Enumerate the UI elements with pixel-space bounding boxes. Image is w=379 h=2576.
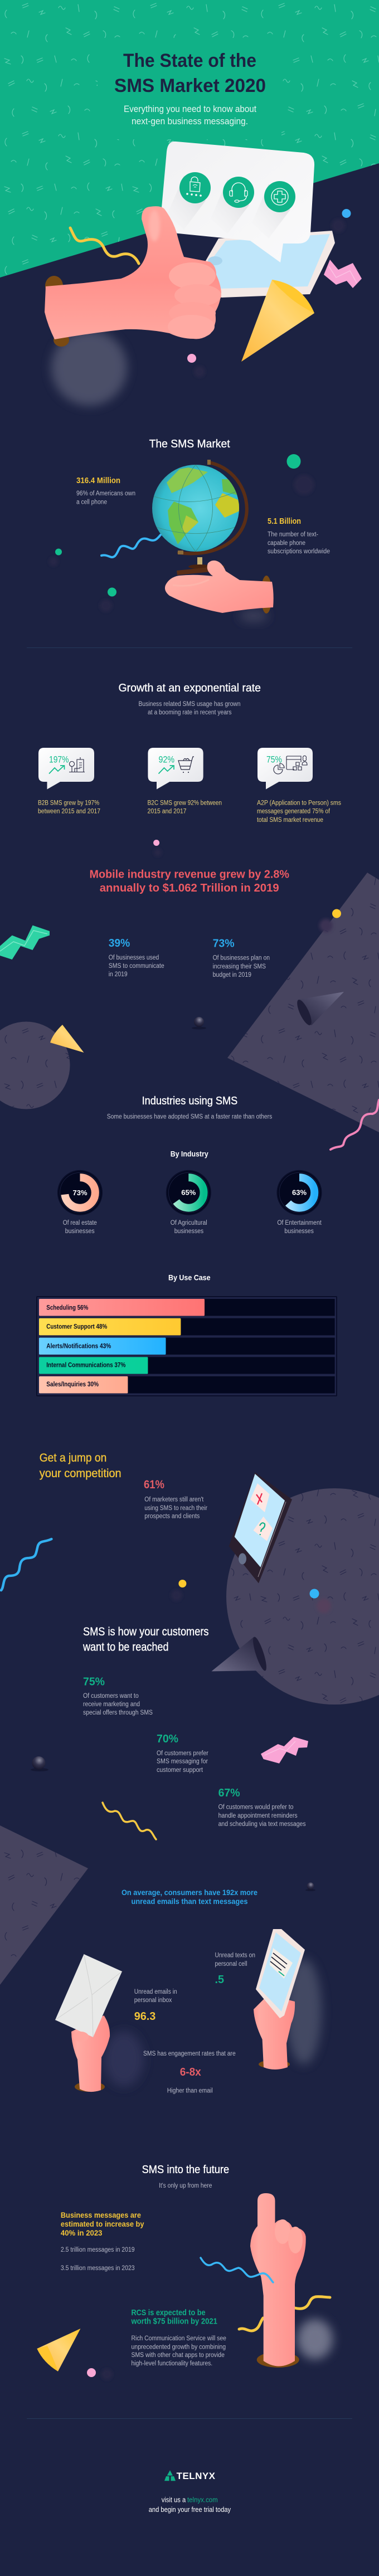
stat: 316.4 Million: [76, 476, 135, 506]
stat: unread emails: 96.3: [134, 2010, 156, 2023]
heading: SMS is how your customers want to be reached: SMS is how your customers: [83, 1625, 208, 1638]
illustration: hand holding envelope: [55, 1954, 122, 2092]
call to action: and begin your free trial today: [149, 2505, 231, 2514]
icon: green zigzag: [0, 926, 50, 960]
patterned circle left: [0, 1022, 70, 1109]
heading: SMS into the future: SMS into the future: [142, 2164, 229, 2176]
illustration: hand holding phone: [254, 1929, 305, 2069]
stat: 39%: in 2019: [109, 971, 128, 978]
card: B2B 197%: 197%: [49, 754, 69, 764]
call to action: telnyx.com: [187, 2496, 218, 2504]
icon: yellow cone: [241, 280, 314, 362]
bar: Scheduling: [39, 1299, 205, 1316]
heading: SMS into the future: [142, 2164, 229, 2189]
heading: Growth at an exponential rate: at a booming rate in recent years: [148, 709, 232, 716]
icon: medical cross: [264, 181, 295, 212]
heading: The SMS Market: The SMS Market: [149, 438, 230, 450]
heading: Get a jump on your competition: Get a jump on: [40, 1452, 106, 1464]
logo: Telnyx: TELNYX: [177, 2471, 216, 2481]
icon: yellow cone small: [50, 1025, 84, 1053]
stat: RCS: SMS with other chat apps to provide: [132, 2352, 225, 2359]
title: [114, 50, 266, 96]
bar: Sales/Inquiries: Sales/Inquiries 30%: [46, 1381, 99, 1388]
stat: RCS: RCS is expected to be: [132, 2308, 205, 2317]
blue squiggle: [201, 2258, 273, 2282]
icon: blue phone behind bubble: [206, 231, 335, 298]
icon: question bubble: [253, 1517, 273, 1541]
stat: 5.1 Billion: The number of text-: [268, 532, 318, 538]
stat: 5.1 Billion: 5.1 Billion: [268, 517, 301, 526]
stat: business messages: 2.5 trillion messages in 2019: [61, 2247, 135, 2253]
caption: A2P: total SMS market revenue: [257, 817, 323, 824]
donut captions: [63, 1220, 322, 1235]
stat: 61%: Of marketers still aren't: [144, 1497, 204, 1503]
subtitle: [124, 104, 256, 126]
heading: SMS is how your customers want to be reached: want to be reached: [82, 1640, 168, 1654]
stat: 67%: [218, 1787, 306, 1828]
bar: Scheduling: Scheduling 56%: [46, 1305, 88, 1312]
subtitle: Everything you need to know about: [124, 104, 256, 114]
headline: mobile revenue: [89, 868, 289, 894]
speech bubble with three icons: [161, 142, 314, 262]
donut chart: 63% entertainment: 63%: [292, 1188, 307, 1197]
icon: building and tree: [69, 757, 85, 772]
stat: 5.1 Billion: capable phone: [268, 540, 305, 547]
blue squiggle: [101, 535, 161, 557]
subheading: By Industry: By Industry: [171, 1150, 208, 1158]
bar: Sales/Inquiries: [39, 1376, 128, 1393]
stat: business messages: [61, 2210, 144, 2272]
stat: 73%: increasing their SMS: [213, 963, 266, 970]
heading: Industries using SMS: Industries using SMS: [142, 1095, 237, 1107]
donut chart: 65% agricultural: [167, 1171, 211, 1215]
stat: 39%: Of businesses used: [109, 955, 159, 961]
donut chart: 73% real estate: 73%: [72, 1189, 88, 1197]
stat: business messages: 3.5 trillion messages in 2023: [61, 2265, 135, 2272]
stat: 70%: 70%: [157, 1733, 178, 1745]
blue squiggle: [1, 1539, 51, 1590]
icon: small dark sphere: [305, 1882, 315, 1891]
heading: Get a jump on your competition: your competition: [40, 1467, 122, 1480]
stat: 67%: Of customers would prefer to: [218, 1804, 293, 1811]
donut captions: businesses: [65, 1228, 95, 1235]
green dots: [49, 454, 314, 612]
call to action: visit us a: [162, 2496, 186, 2504]
heading: Industries using SMS: [107, 1095, 273, 1121]
caption: B2B: between 2015 and 2017: [38, 809, 100, 815]
title: SMS Market 2020: [114, 75, 266, 96]
donut chart: 63% entertainment: [278, 1171, 321, 1215]
caption: A2P: messages generated 75% of: [257, 809, 331, 815]
stat: 5.1 Billion: subscriptions worldwide: [268, 548, 330, 555]
headline: unread emails: unread emails than text messages: [132, 1897, 248, 1906]
icon: shopping cart: [178, 757, 194, 770]
icon: dark cone 2: [212, 1635, 269, 1672]
stat: 61%: using SMS to reach their: [144, 1505, 207, 1512]
stat: 67%: and scheduling via text messages: [218, 1821, 306, 1828]
yellow squiggle: [103, 1803, 156, 1839]
caption: B2B: [38, 800, 100, 815]
stat: engagement 6-8x: 6-8x: [180, 2066, 201, 2078]
stat: 73%: 73%: [213, 938, 235, 950]
stat: 61%: prospects and clients: [144, 1513, 200, 1520]
glow behind hands: [104, 1959, 322, 2087]
card: B2C 92%: [148, 748, 203, 789]
icon: headset: [223, 177, 254, 208]
large patterned circle: [226, 1488, 379, 1705]
headline: mobile revenue: Mobile industry revenue grew by 2.8%: [89, 868, 289, 881]
stat: unread emails: [134, 1989, 177, 2023]
yellow dot: [319, 909, 341, 932]
stat: 70%: Of customers prefer: [157, 1750, 208, 1757]
stat: 70%: customer support: [157, 1767, 203, 1774]
illustration: tilted phone with bubbles: [229, 1472, 292, 1583]
stat: 316.4 Million: a cell phone: [76, 499, 107, 506]
stat: unread texts: .5: [215, 1974, 224, 1986]
stat: business messages: 40% in 2023: [61, 2228, 103, 2237]
icon: growth arrow: [49, 766, 65, 773]
caption: A2P: A2P (Application to Person) sms: [257, 800, 341, 807]
card: A2P 75%: [257, 748, 313, 789]
stat: 5.1 Billion: [268, 517, 330, 555]
illustration: thumbs up hand: [45, 206, 221, 347]
stat: 39%: [109, 937, 164, 978]
glow under thumb arm: [51, 330, 127, 406]
heading: Growth at an exponential rate: Business related SMS usage has grown: [138, 701, 241, 708]
stat: unread emails: personal inbox: [134, 1997, 172, 2004]
stat: unread texts: [215, 1952, 255, 1986]
stat: unread texts: personal cell: [215, 1961, 247, 1968]
stat: 75%: receive marketing and: [83, 1701, 140, 1708]
stat: RCS: worth $75 billion by 2021: [131, 2317, 217, 2326]
card: B2C 92%: 92%: [158, 754, 174, 764]
donut captions: Of Entertainment: [277, 1220, 322, 1226]
stat: 70%: [157, 1733, 208, 1774]
stat: business messages: Business messages are: [61, 2210, 141, 2219]
stat: 316.4 Million: 316.4 Million: [76, 476, 120, 485]
bar: Internal Communications: Internal Communications 37%: [46, 1362, 125, 1369]
icon: dark sphere: [192, 1017, 206, 1030]
headline: mobile revenue: annually to $1.062 Trillion in 2019: [100, 882, 279, 894]
stat: unread texts: Unread texts on: [215, 1952, 255, 1959]
caption: B2B: B2B SMS grew by 197%: [38, 800, 99, 807]
headline: unread emails: [122, 1888, 257, 1906]
donut captions: Of Agricultural: [171, 1220, 207, 1226]
stat: 75%: Of customers want to: [83, 1693, 139, 1700]
pink dot: [87, 2368, 113, 2380]
icon: phone: [256, 1929, 305, 2018]
stat: RCS: unprecedented growth by combining: [132, 2344, 226, 2350]
stat: 75%: special offers through SMS: [83, 1710, 153, 1716]
patterned quadrilateral left: [0, 1825, 88, 1985]
stat: RCS: Rich Communication Service will see: [132, 2335, 226, 2342]
heading: Get a jump on your competition: [40, 1452, 122, 1480]
subheading: By Use Case: By Use Case: [168, 1273, 211, 1282]
pink squiggle: [331, 1100, 379, 1150]
stat: engagement 6-8x: SMS has engagement rates that are: [143, 2051, 236, 2057]
pink dot: [153, 840, 162, 856]
heading: SMS into the future: It's only up from here: [159, 2183, 212, 2189]
decorative dots: [187, 209, 351, 377]
stat: 39%: SMS to communicate: [109, 963, 164, 970]
small dots: [171, 1580, 331, 1613]
stat: engagement 6-8x: [143, 2051, 236, 2095]
patterned quadrilateral right: [227, 873, 379, 1132]
stat: 61%: [144, 1478, 207, 1520]
icon: yellow cone bottom: [37, 2329, 80, 2372]
headline: unread emails: On average, consumers have 192x more: [122, 1888, 257, 1897]
caption: A2P: [257, 800, 341, 824]
icon: X bubble: [250, 1483, 270, 1512]
bar: Alerts/Notifications: [39, 1338, 166, 1355]
icon: growth arrow: [158, 766, 174, 773]
donut chart: 73% real estate: [58, 1171, 102, 1215]
bar: Customer Support: Customer Support 48%: [46, 1324, 107, 1331]
icon: pie chart: [274, 763, 284, 774]
illustration: globe on stand: [152, 460, 247, 575]
icon: dark sphere: [31, 1756, 48, 1771]
subtitle: next-gen business messaging.: [132, 116, 248, 126]
glow under globe hand: [239, 609, 268, 622]
caption: B2C: [147, 800, 222, 815]
icon: dashboard and user: [286, 756, 307, 770]
stat: 73%: [213, 938, 270, 978]
icon: pink zigzag: [261, 1737, 308, 1764]
call to action: [149, 2496, 231, 2514]
card: B2B 197%: [38, 748, 94, 789]
illustration: pointing finger hand: [250, 2193, 306, 2368]
stat: 70%: SMS messaging for: [157, 1759, 208, 1765]
stat: 39%: 39%: [109, 937, 130, 949]
stat: RCS: high-level functionality features.: [132, 2360, 212, 2367]
stat: business messages: estimated to increase by: [61, 2219, 144, 2228]
bar: Customer Support: [39, 1318, 181, 1335]
stat: 75%: [83, 1676, 153, 1716]
donut captions: businesses: [284, 1228, 314, 1235]
bar: Alerts/Notifications: Alerts/Notifications 43%: [46, 1343, 111, 1350]
illustration: hand holding globe: [165, 561, 274, 613]
title: The State of the: [123, 50, 256, 71]
donut captions: Of real estate: [63, 1220, 97, 1226]
caption: B2C: 2015 and 2017: [147, 809, 186, 815]
stat: engagement 6-8x: Higher than email: [167, 2088, 213, 2095]
icon: pink zigzag: [324, 260, 362, 288]
stat: 67%: 67%: [218, 1787, 240, 1799]
stat: 67%: handle appointment reminders: [218, 1813, 298, 1819]
stat: 61%: 61%: [144, 1478, 164, 1491]
icon: lock with password: [179, 172, 211, 203]
stat: 75%: 75%: [83, 1676, 105, 1688]
stat: 73%: budget in 2019: [213, 972, 251, 978]
card: A2P 75%: 75%: [266, 754, 282, 764]
icon: dark cone: [294, 992, 344, 1027]
stat: 73%: Of businesses plan on: [213, 955, 270, 962]
donut captions: businesses: [174, 1228, 203, 1235]
glow behind finger arm: [297, 2319, 333, 2359]
icon: envelope: [55, 1954, 122, 2037]
panel: green header background: [0, 0, 379, 277]
bar: Internal Communications: [39, 1357, 148, 1374]
stat: unread emails: Unread emails in: [134, 1989, 177, 1995]
heading: Industries using SMS: Some businesses have adopted SMS at a faster rate than others: [107, 1114, 273, 1121]
heading: SMS is how your customers want to be reached: [82, 1625, 208, 1654]
heading: Growth at an exponential rate: Growth at an exponential rate: [118, 682, 261, 694]
caption: B2C: B2C SMS grew 92% between: [147, 800, 222, 807]
stat: 316.4 Million: 96% of Americans own: [76, 490, 135, 497]
yellow squiggle: [70, 228, 139, 264]
stat: RCS: [131, 2308, 226, 2367]
bar chart: use cases: [36, 1296, 337, 1396]
heading: Growth at an exponential rate: [118, 682, 261, 716]
donut chart: 65% agricultural: 65%: [181, 1188, 196, 1197]
yellow squiggle behind arm: [239, 2297, 330, 2331]
